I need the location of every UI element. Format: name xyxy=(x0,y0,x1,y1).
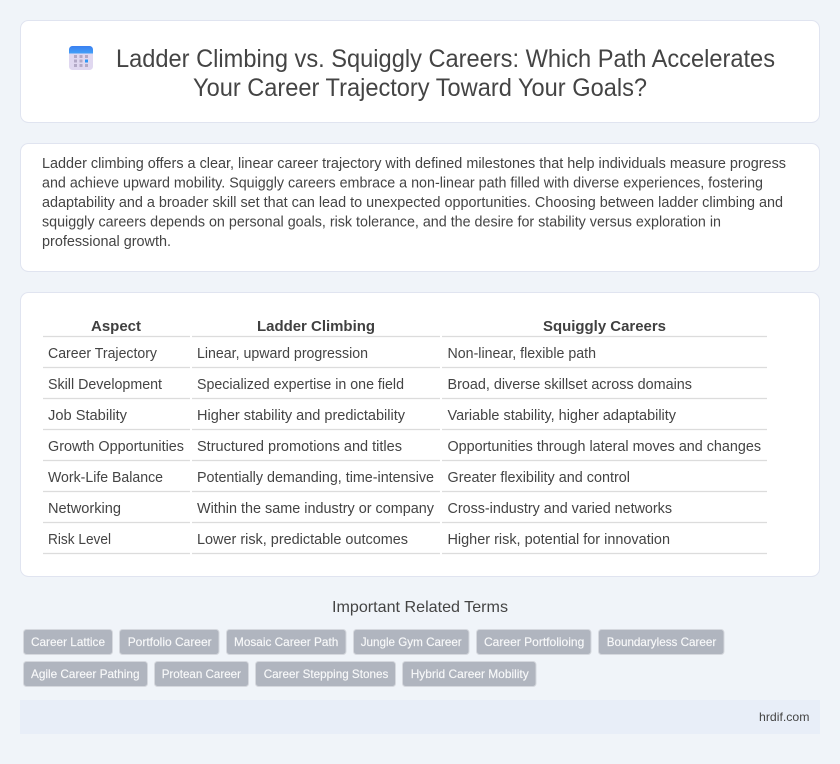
row: networking: Networking xyxy=(48,501,121,517)
table header row: Squiggly Careers xyxy=(543,319,666,335)
row: work-life balance: Potentially demanding, time-intensive xyxy=(197,470,434,486)
text block: introduction paragraph: adaptability and a broader skill set that can lead to unexpected opportunities. Choosing between ladder climbing and xyxy=(42,195,783,211)
tag: agile career pathing xyxy=(24,662,148,686)
title: Your Career Trajectory Toward Your Goals? xyxy=(193,74,647,102)
row: career trajectory: Non-linear, flexible path xyxy=(448,346,596,362)
row: networking: Cross-industry and varied networks xyxy=(448,501,672,517)
tag: protean career: Protean Career xyxy=(162,667,241,681)
row: growth opportunities: Structured promotions and titles xyxy=(197,439,402,455)
row: job stability: Variable stability, higher adaptability xyxy=(448,408,677,424)
row: skill development xyxy=(48,377,692,393)
tag: hybrid career mobility: Hybrid Career Mobility xyxy=(411,667,529,681)
row: skill development: Broad, diverse skillset across domains xyxy=(448,377,692,393)
tag: jungle gym career: Jungle Gym Career xyxy=(361,635,462,649)
text block: introduction paragraph: and achieve upward mobility. Squiggly careers embrace a non-linear path filled with diverse experiences, fostering xyxy=(42,176,763,192)
tag: career stepping stones xyxy=(256,662,396,686)
tag: mosaic career path xyxy=(226,630,346,654)
heading: important related terms: Important Related Terms xyxy=(332,599,508,616)
tag: protean career xyxy=(154,662,248,686)
panel: comparison table xyxy=(20,292,820,576)
text block: introduction paragraph: Ladder climbing offers a clear, linear career trajectory with defined milestones that help individuals measure progress xyxy=(42,156,786,172)
row: career trajectory: Career Trajectory xyxy=(48,346,158,362)
title: Ladder Climbing vs. Squiggly Careers: Which Path Accelerates xyxy=(116,45,775,73)
title xyxy=(116,45,775,102)
row: work-life balance xyxy=(48,470,630,486)
tag: jungle gym career xyxy=(354,630,469,654)
row: job stability: Higher stability and predictability xyxy=(197,408,406,424)
row: job stability xyxy=(48,408,677,424)
table header row: Ladder Climbing xyxy=(257,319,375,335)
related term tags xyxy=(24,630,724,686)
tag: career portfolioing xyxy=(476,630,591,654)
table header row: Aspect xyxy=(91,319,141,335)
footer xyxy=(20,700,820,734)
tag: agile career pathing: Agile Career Pathing xyxy=(31,667,140,681)
tag: career lattice xyxy=(24,630,112,654)
tag: career stepping stones: Career Stepping Stones xyxy=(264,667,388,681)
row: networking: Within the same industry or company xyxy=(197,501,435,517)
row: risk level xyxy=(48,532,670,548)
text block: introduction paragraph: professional growth. xyxy=(42,234,171,250)
tag: career lattice: Career Lattice xyxy=(31,635,105,649)
row: risk level: Higher risk, potential for innovation xyxy=(448,532,670,548)
row: growth opportunities xyxy=(48,439,761,455)
row: growth opportunities: Opportunities through lateral moves and changes xyxy=(448,439,761,455)
panel: introduction xyxy=(20,144,820,272)
row: work-life balance: Greater flexibility and control xyxy=(448,470,630,486)
row: skill development: Specialized expertise in one field xyxy=(197,377,404,393)
icon: calendar xyxy=(69,46,93,70)
row: risk level: Risk Level xyxy=(48,532,111,548)
row: networking xyxy=(48,501,672,517)
tag: hybrid career mobility xyxy=(402,662,536,686)
tag: mosaic career path: Mosaic Career Path xyxy=(234,635,338,649)
row: skill development: Skill Development xyxy=(48,377,162,393)
panel: header xyxy=(20,20,820,122)
row: work-life balance: Work-Life Balance xyxy=(48,470,163,486)
tag: boundaryless career: Boundaryless Career xyxy=(607,635,716,649)
row: growth opportunities: Growth Opportunities xyxy=(48,439,184,455)
row: job stability: Job Stability xyxy=(48,408,128,424)
tag: boundaryless career xyxy=(598,630,724,654)
text block: introduction paragraph: squiggly careers depends on personal goals, risk tolerance, and the desire for stability versus exploration in xyxy=(42,214,721,230)
tag: portfolio career: Portfolio Career xyxy=(128,635,212,649)
row: career trajectory: Linear, upward progression xyxy=(197,346,368,362)
text block: introduction paragraph xyxy=(42,156,786,250)
footer site name: hrdif.com xyxy=(759,710,810,724)
table header row xyxy=(91,319,666,335)
row: career trajectory xyxy=(48,346,596,362)
tag: portfolio career xyxy=(120,630,219,654)
tag: career portfolioing: Career Portfolioing xyxy=(484,635,584,649)
row: risk level: Lower risk, predictable outcomes xyxy=(197,532,408,548)
